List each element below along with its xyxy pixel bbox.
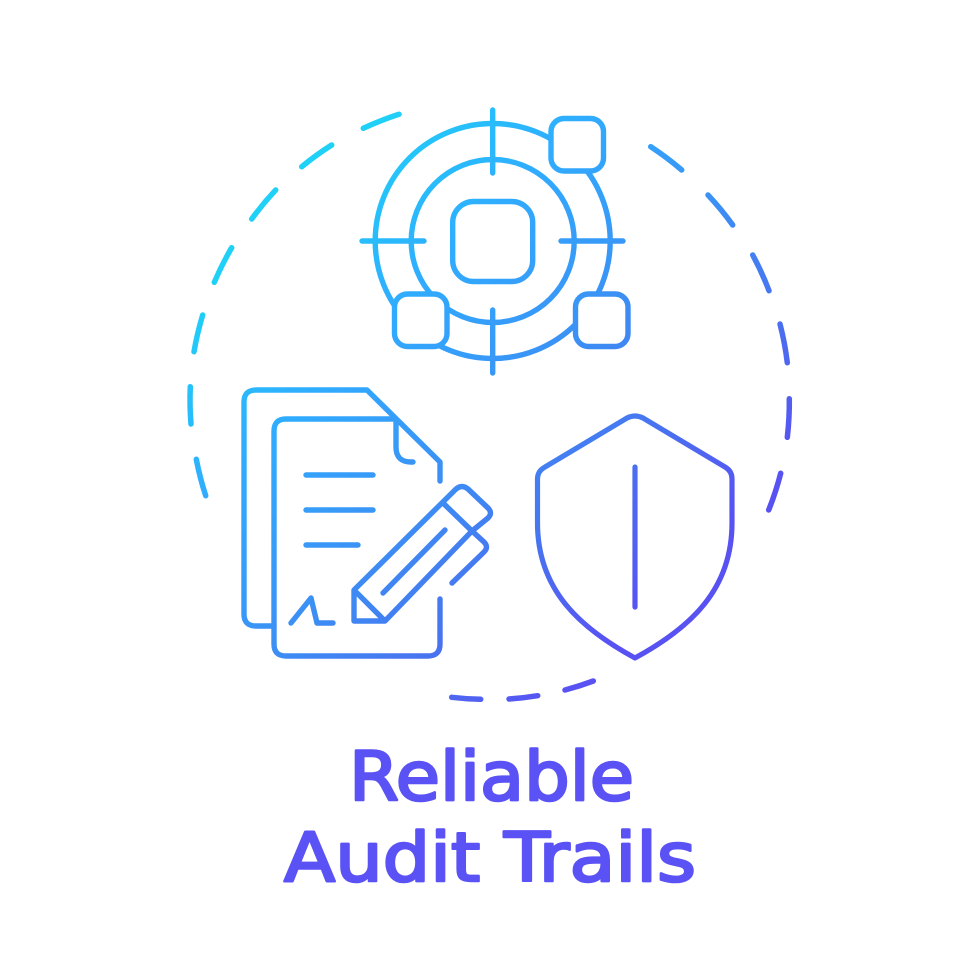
signature	[291, 598, 333, 623]
text lines	[306, 475, 373, 545]
icon: shield	[538, 416, 732, 658]
title	[284, 738, 696, 898]
front page	[274, 419, 440, 656]
title line 2: Audit Trails	[284, 819, 696, 898]
back page	[244, 390, 440, 626]
icon: target with nodes	[362, 110, 628, 373]
title line 1: Reliable	[349, 738, 634, 817]
icon: documents with pencil	[244, 390, 490, 656]
dashed circular ring	[190, 114, 789, 699]
pencil	[354, 486, 490, 621]
